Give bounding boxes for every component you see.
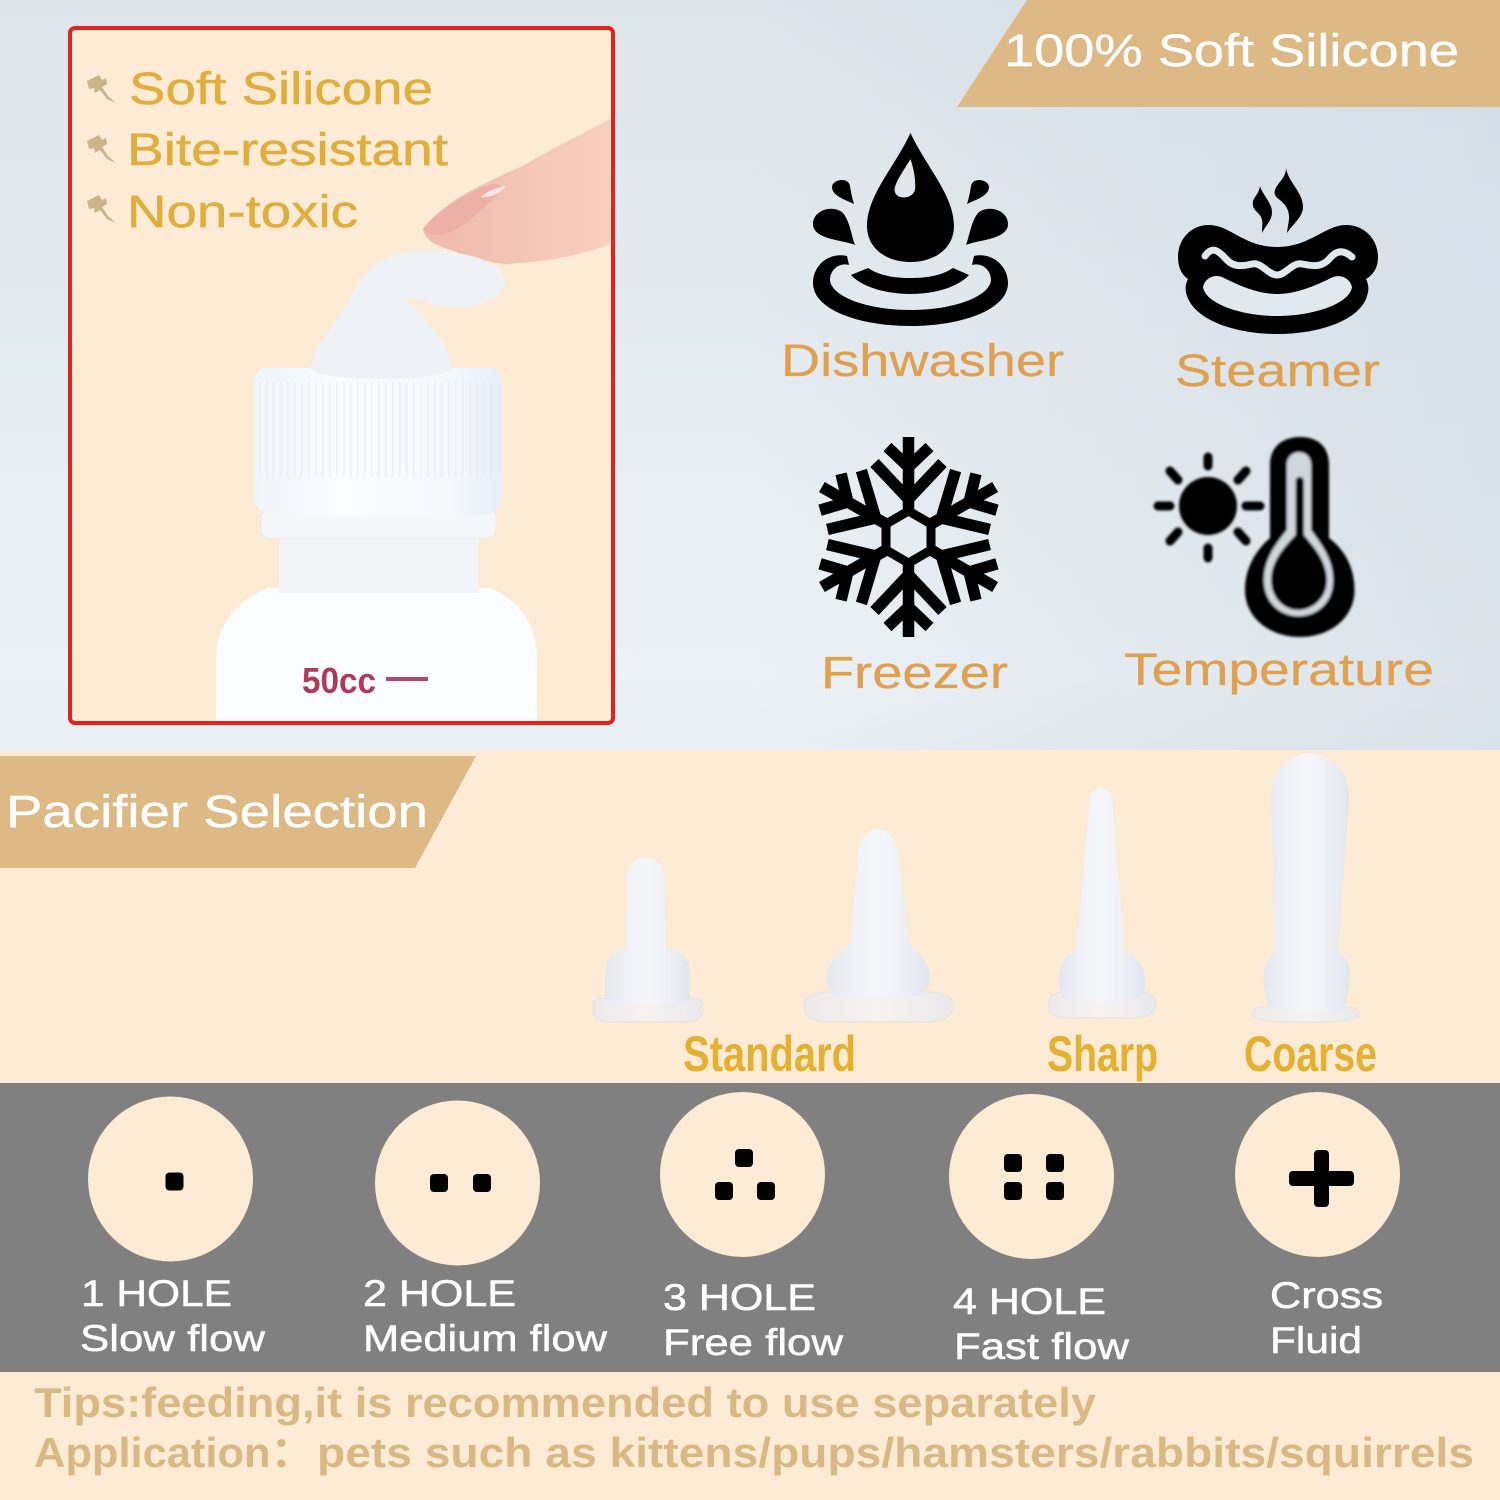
- hole type: cross: Cross: [1270, 1275, 1383, 1316]
- banner: 100% soft silicone: [957, 0, 1500, 107]
- feature: steamer: [1175, 168, 1380, 396]
- hole type: 3 hole: Free flow: [663, 1322, 843, 1363]
- cap: [254, 368, 502, 515]
- hole type: cross: Fluid: [1270, 1320, 1362, 1361]
- hole type: 4 hole: Fast flow: [954, 1326, 1129, 1367]
- bullet 3: [87, 195, 116, 223]
- pacifier: coarse: [1252, 754, 1359, 1022]
- banner: pacifier selection: [0, 756, 476, 868]
- bullet 1: [87, 75, 116, 103]
- hole type: cross: [1235, 1092, 1400, 1361]
- background: upper section: [0, 0, 1500, 750]
- tips line: Tips:feeding,it is recommended to use separately: [34, 1379, 1097, 1426]
- label: Dishwasher: [781, 335, 1064, 386]
- text: non-toxic: Non-toxic: [127, 186, 358, 237]
- bottle: [216, 250, 537, 721]
- hole type: 2 hole: [363, 1100, 607, 1359]
- text: bite-resistant: Bite-resistant: [127, 124, 449, 175]
- hole type: 1 hole: 1 HOLE: [81, 1273, 232, 1314]
- silicone nipple: [310, 250, 505, 379]
- bottle body: [216, 588, 537, 721]
- icon: snowflake: [805, 437, 1012, 637]
- bottle neck: [279, 535, 479, 593]
- icon: hot dog: [1178, 168, 1378, 334]
- banner: pacifier selection: Pacifier Selection: [6, 786, 428, 837]
- label: standard: Standard: [683, 1026, 856, 1082]
- hole type: 1 hole: Slow flow: [80, 1318, 265, 1359]
- scale label: 50cc: [302, 660, 376, 701]
- bottle ring: [261, 510, 496, 538]
- banner: 100% soft silicone: 100% Soft Silicone: [1004, 25, 1459, 76]
- panel: hole types: [0, 1083, 1500, 1372]
- pacifier: standard small: [593, 858, 703, 1022]
- feature: freezer: [805, 437, 1012, 698]
- finger: [423, 119, 610, 264]
- application line: Application：: [34, 1429, 314, 1476]
- label: Steamer: [1175, 345, 1380, 396]
- nail highlight: [481, 186, 506, 197]
- application line: pets such as kittens/pups/hamsters/rabbits/squirrels: [317, 1429, 1474, 1476]
- bullet 2: [87, 135, 116, 163]
- pacifier: standard large: [805, 829, 952, 1022]
- icon: sun and thermometer: [1158, 437, 1354, 637]
- bullet list: [87, 63, 449, 237]
- text: soft silicone: Soft Silicone: [129, 63, 433, 114]
- panel: soft silicone photo: [70, 28, 613, 723]
- hole type: 3 hole: [660, 1092, 843, 1363]
- label: coarse: Coarse: [1244, 1026, 1377, 1082]
- hole type: 2 hole: Medium flow: [363, 1318, 607, 1359]
- cap ribs: [256, 382, 500, 477]
- hole type: 2 hole: 2 HOLE: [363, 1273, 516, 1314]
- panel: tips: [0, 1372, 1500, 1500]
- hole type: 1 hole: [80, 1096, 265, 1359]
- scale mark: [386, 677, 428, 681]
- steam: [1275, 168, 1303, 233]
- feature: temperature: [1124, 437, 1434, 695]
- hole type: 3 hole: 3 HOLE: [663, 1277, 816, 1318]
- hole type: 4 hole: [949, 1094, 1129, 1367]
- label: Freezer: [821, 647, 1008, 698]
- icon: water drop: [813, 133, 1008, 326]
- label: sharp: Sharp: [1047, 1026, 1158, 1082]
- feature: dishwasher: [781, 133, 1064, 386]
- label: Temperature: [1124, 644, 1434, 695]
- background: pacifier section: [0, 750, 1500, 1083]
- pacifier: sharp: [1049, 788, 1155, 1018]
- hole type: 4 hole: 4 HOLE: [953, 1281, 1106, 1322]
- fingernail: [423, 184, 501, 235]
